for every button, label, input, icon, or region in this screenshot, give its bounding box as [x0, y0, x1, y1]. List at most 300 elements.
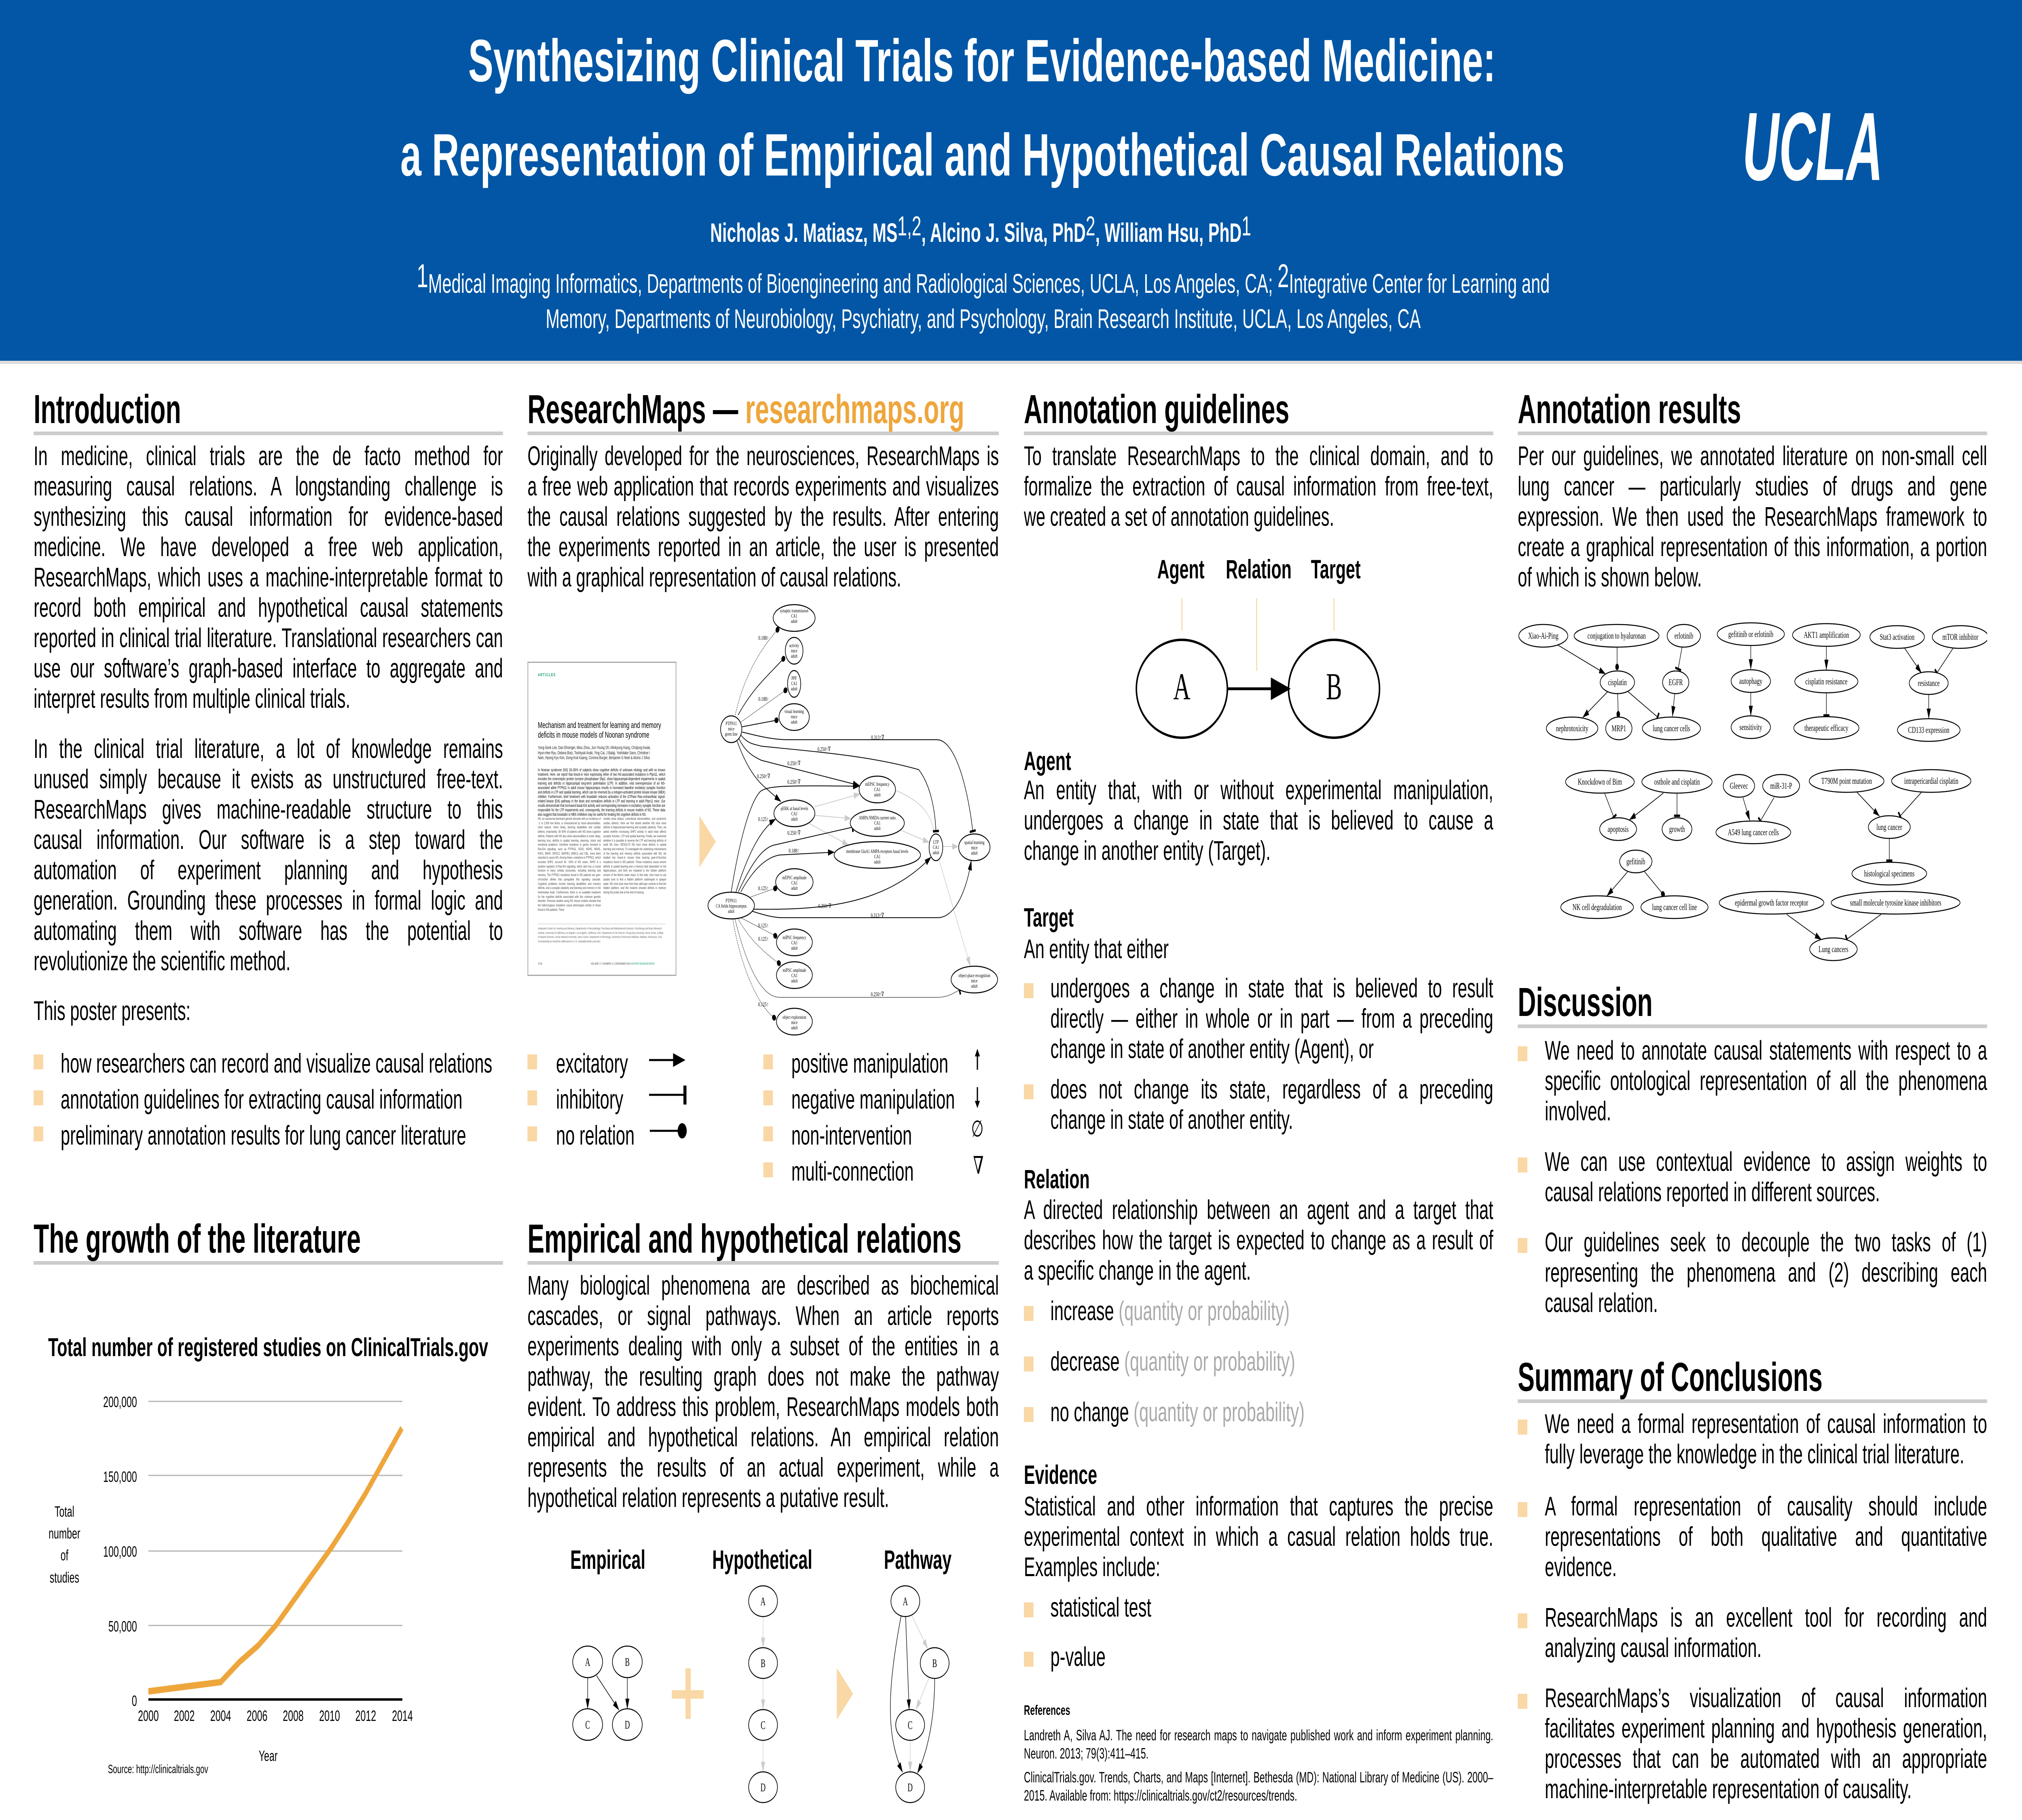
edges — [1558, 645, 1953, 940]
heading: growth of the literature: The growth of the literature — [34, 1216, 361, 1261]
text: researchmaps description: the experiments reported in an article, the user is presented — [527, 532, 999, 562]
label: hypothetical: Hypothetical — [712, 1545, 812, 1575]
y-axis labels: 50,000 — [108, 1618, 137, 1635]
bullet: contextual evidence: We can use contextual evidence to assign weights to — [1545, 1147, 1987, 1177]
bullet: visualization: facilitates experiment planning and hypothesis generation, — [1545, 1714, 1987, 1744]
text: relation definition: a specific change in the agent. — [1024, 1256, 1251, 1286]
nodes: gefitinib — [1626, 857, 1645, 866]
edge weight labels: 0.188↑ — [789, 847, 799, 854]
nodes: epidermal growth factor receptor — [1735, 898, 1808, 908]
text: researchmaps description: Originally developed for the neurosciences, ResearchMaps is — [527, 441, 999, 471]
edge weight labels: 0.250↑∇ — [871, 991, 884, 998]
heading: introduction — [34, 387, 503, 435]
text: agent definition: undergoes a change in state that is believed to cause a — [1024, 806, 1493, 836]
panel: discussion — [1518, 980, 1987, 1315]
bullet: decrease — [1024, 1347, 1493, 1377]
text: intro paragraph 2: ResearchMaps gives machine-readable structure to this — [34, 795, 503, 825]
edge weight labels: 0.188↑ — [758, 635, 769, 641]
hypothetical graph — [749, 1586, 777, 1803]
graph nodes: germ line — [725, 731, 738, 737]
nodes: resistance — [1918, 678, 1940, 688]
y-axis title: number — [49, 1525, 80, 1542]
text: researchmaps description: the causal relations suggested by the results. After entering — [527, 502, 999, 532]
graph nodes: PTPN11 — [725, 898, 737, 904]
nodes: histological specimens — [1864, 869, 1914, 878]
hypothetical graph: C — [761, 1719, 766, 1732]
diagram: agent relation target: Relation — [1226, 554, 1292, 584]
nodes: lung cancer cell line — [1652, 902, 1697, 912]
nodes: gefitinib or erlotinib — [1728, 629, 1773, 639]
list: poster contents: annotation guidelines for extracting causal information — [61, 1085, 462, 1115]
nodes: Knockdown of Bim — [1578, 777, 1622, 787]
text: evidence definition — [1024, 1492, 1493, 1583]
text: relations description: cascades, or signal pathways. When an article reports — [527, 1301, 999, 1331]
text: relations description: evident. To address this problem, ResearchMaps models both — [527, 1392, 999, 1422]
y-axis title — [49, 1503, 80, 1586]
graph nodes: adult — [791, 686, 797, 692]
graph nodes: pERK at basal levels — [780, 806, 808, 812]
edge weight labels — [757, 635, 884, 1008]
bullet: ontological representation: specific ontological representation of all the phenomena — [1545, 1066, 1987, 1096]
text: intro paragraph 2: revolutionize the scientific method. — [34, 946, 290, 976]
heading: summary of conclusions: Summary of Conclusions — [1518, 1354, 1823, 1400]
legend: manipulation types: negative manipulation — [791, 1085, 955, 1115]
edge weight labels: 0.188↑ — [758, 696, 769, 703]
reference one: Landreth A, Silva AJ. The need for research maps to navigate published work and inform experiment planning. — [1024, 1727, 1493, 1744]
subheading: relation: Relation — [1024, 1164, 1090, 1194]
text: evidence definition: Examples include: — [1024, 1552, 1160, 1582]
graph nodes: CA1 — [791, 681, 797, 687]
graph nodes: CA1 — [791, 613, 797, 619]
text: target definition: An entity that either — [1024, 934, 1169, 964]
label: empirical: Empirical — [570, 1545, 645, 1575]
graph nodes: adult — [791, 816, 797, 822]
bullet: increase: increase (quantity or probability) — [1051, 1296, 1290, 1326]
nodes: mTOR inhibitor — [1942, 632, 1978, 642]
article thumbnail: Mechanism and treatment for learning and memory — [538, 720, 661, 730]
edge weight labels: 0.250↑∇ — [818, 903, 831, 910]
heading: annotation results: Annotation results — [1518, 387, 1741, 432]
graph nodes: CA1 — [791, 880, 797, 886]
edge weight labels: 0.250↑∇ — [787, 830, 800, 836]
graph nodes: PPF — [791, 675, 797, 681]
diagram: agent relation target: Agent — [1157, 554, 1204, 584]
x-axis labels: 2000 — [138, 1707, 159, 1724]
gray hypothetical edges — [808, 790, 971, 967]
nodes: lung cancer cells — [1653, 724, 1690, 733]
reference two: 2015. Available from: https://clinicaltrials.gov/ct2/resources/trends. — [1024, 1787, 1297, 1804]
bullet: increase — [1024, 1296, 1493, 1327]
legend: manipulation types: multi-connection — [791, 1157, 914, 1187]
bullet: contextual evidence — [1518, 1147, 1987, 1208]
pathway graph: C — [908, 1719, 912, 1732]
graph nodes: adult — [874, 792, 880, 798]
bullet: excellent tool: ResearchMaps is an excellent tool for recording and — [1545, 1603, 1987, 1633]
authors: Nicholas J. Matiasz, MS1,2, Alcino J. Silva, PhD2, William Hsu, PhD1 — [710, 211, 1251, 248]
subheading: evidence: Evidence — [1024, 1460, 1097, 1490]
graph nodes: PTPN11 — [725, 721, 737, 727]
edge weight labels: 0.250↑∇ — [817, 746, 831, 753]
article thumbnail: Integrative Center for Learning and Memory, Departments of Neurobiology, Psychiatry and Biobehavioral Sciences, Psychology and Brain Research Institute, University of California Los Angeles, Los Angeles, California, USA. Department of Life Science, Chung-Ang University, Seoul, Korea. College of Natural Sciences, Seoul National University, Seoul, Korea. Department of Neurology, University of Wisconsin-Madison, Madison, Wisconsin, USA. Correspondence should be addressed to A.J.S. (silvaa@mednet.ucla.edu). — [538, 927, 664, 943]
bullet: qualitative and quantitative — [1518, 1492, 1987, 1583]
empirical graph — [573, 1646, 642, 1740]
graph nodes: mice — [791, 1020, 797, 1026]
graph nodes: adult — [791, 618, 797, 624]
bullet: decrease: decrease (quantity or probability) — [1051, 1347, 1295, 1377]
edge weight labels: 0.125↑ — [758, 816, 768, 823]
bullet: formal representation — [1518, 1409, 1987, 1470]
text: intro paragraph 1: synthesizing this causal information for evidence-based — [34, 502, 503, 532]
bullet: visualization — [1518, 1683, 1987, 1805]
bullet: p-value — [1024, 1642, 1493, 1672]
empirical graph: A — [585, 1656, 590, 1669]
text: intro paragraph 1: measuring causal relations. A longstanding challenge is — [34, 472, 503, 502]
bullet: visualization: processes that can be automated with an appropriate — [1545, 1744, 1987, 1774]
nodes: EGFR — [1669, 677, 1683, 687]
text: intro paragraph 1: use our software’s graph-based interface to aggregate and — [34, 654, 503, 684]
nodes: T790M point mutation — [1821, 776, 1872, 786]
text: annotation results description: expression. We then used the ResearchMaps framework to — [1518, 502, 1987, 532]
nodes: small molecule tyrosine kinase inhibitors — [1850, 898, 1941, 908]
text: guidelines intro — [1024, 441, 1493, 532]
edge weight labels: 0.250↑∇ — [757, 773, 770, 780]
poster title: Synthesizing Clinical Trials for Evidence-based Medicine: — [468, 28, 1495, 94]
graph nodes: adult — [791, 1025, 797, 1031]
bullet: p-value: p-value — [1051, 1642, 1106, 1672]
bullet: visualization: ResearchMaps’s visualization of causal information — [1545, 1683, 1987, 1713]
edge weight labels: 0.250↑∇ — [787, 760, 800, 767]
heading: empirical and hypothetical: Empirical and hypothetical relations — [527, 1216, 962, 1261]
affiliations — [253, 263, 1714, 340]
nodes: apoptosis — [1607, 824, 1629, 834]
text: researchmaps description: a free web application that records experiments and visualizes — [527, 472, 999, 502]
graph nodes: adult — [933, 850, 939, 856]
x-axis labels: 2002 — [174, 1707, 195, 1724]
graph nodes: CA1 — [933, 844, 939, 851]
nodes: CD133 expression — [1908, 725, 1949, 735]
heading: discussion — [1518, 980, 1987, 1028]
nodes: AKT1 amplification — [1804, 630, 1849, 640]
legend: manipulation types — [764, 1046, 994, 1190]
article thumbnail: Yong-Seok Lee, Dan Ehninger, Miou Zhou, Jun-Young Oh, Minkyung Kang, Chuljung Kwak, Hyun-Hee Ryu, Delana Butz, Toshiyuki Araki, Ying Cai, J Balaji, Yoshitake Sano, Christine I Nam, Hyong Kyu Kim, Dong-Kuk Kaang, Corinna Burger, Benjamin G Neel & Alcino J Silva — [538, 745, 651, 760]
x-axis labels — [138, 1707, 413, 1724]
pathway graph: B — [932, 1657, 937, 1670]
diagram: agent relation target: B — [1326, 665, 1342, 707]
text: poster presents: This poster presents: — [34, 996, 190, 1026]
nodes: therapeutic efficacy — [1804, 723, 1849, 733]
x-axis labels: 2006 — [247, 1707, 267, 1724]
graph nodes: adult — [728, 908, 734, 914]
subheading: agent: Agent — [1024, 746, 1071, 776]
bullet: visualization: machine-interpretable representation of causality. — [1545, 1774, 1912, 1804]
text: annotation results description: lung cancer — particularly studies of drugs and gene — [1518, 472, 1987, 502]
bullet: decouple tasks: representing the phenomena and (2) describing each — [1545, 1258, 1987, 1288]
x-axis labels: 2010 — [319, 1707, 340, 1724]
legend: relation types: no relation — [556, 1121, 635, 1151]
text: agent definition: change in another entity (Target). — [1024, 836, 1271, 866]
graph nodes: adult — [791, 978, 797, 984]
y-axis labels: 150,000 — [103, 1468, 137, 1485]
bullet: qualitative and quantitative: representations of both qualitative and quantitative — [1545, 1522, 1987, 1552]
graph nodes: mice — [791, 714, 797, 720]
legend: manipulation symbols: ∅ — [971, 1117, 984, 1142]
nodes: sensitivity — [1739, 722, 1762, 732]
bullet: statistical test: statistical test — [1051, 1593, 1151, 1623]
nodes: cisplatin — [1608, 677, 1627, 687]
graph nodes: spatial learning — [964, 840, 985, 846]
text: evidence definition: Statistical and other information that captures the precise — [1024, 1492, 1493, 1522]
text: relations description — [527, 1271, 999, 1513]
reference one: Neuron. 2013; 79(3):411–415. — [1024, 1745, 1148, 1762]
text: intro paragraph 1: medicine. We have developed a free web application, — [34, 532, 503, 562]
panel: introduction — [34, 387, 503, 1151]
graph nodes: LTP — [933, 839, 939, 845]
nodes: Stat3 activation — [1880, 632, 1914, 642]
legend: relation symbols — [647, 1043, 713, 1141]
text: intro paragraph 1: reported in clinical trial literature. Translational researchers can — [34, 623, 503, 653]
bullet: formal representation: fully leverage the knowledge in the clinical trial literature. — [1545, 1439, 1964, 1469]
article thumbnail: deficits in mouse models of Noonan syndrome — [538, 730, 649, 740]
bullet: target case one: change in state of another entity (Agent), or — [1051, 1034, 1374, 1064]
article thumbnail: models show delays, craniofacial abnormalities, and syndromic cardiac defects. Here we first tested whether NS mice have deficits in hippocampal learning and synaptic plasticity. Then, we asked whether increasing SHP2 activity in adult brain affects synaptic function, LTP and spatial learning. Finally, we examined whether it is possible to reverse the LTP and learning deficits of adult NS mice. RESULTS NS mice show deficits in spatial learning and memory. To investigate the underlying mechanisms of the learning and memory deficits associated with NS, we studied two knock-in mouse lines bearing gain-of-function mutations found in NS patients. These mutations cause severe deficits in spatial learning and a memory task dependent on the hippocampus, and both are impaired in the hidden platform version of the Morris water maze. In this task, mice have to use spatial cues to find a hidden platform submerged in opaque water. NS mice took more time than wild-type controls to find the hidden platform, and the mutants showed deficits in memory during the probe trial at the end of training. — [603, 817, 666, 894]
bullet: formal representation: We need a formal representation of causal information to — [1545, 1409, 1987, 1439]
causal graph example — [527, 595, 999, 1039]
graph nodes: CA1 — [874, 820, 880, 826]
text: researchmaps description: with a graphical representation of causal relations. — [527, 563, 901, 593]
graph nodes: CA1 — [791, 940, 797, 946]
graph nodes: object-place recognition — [958, 973, 990, 979]
graph nodes: adult — [971, 850, 977, 856]
graph nodes: mIPSC frequency — [783, 935, 806, 941]
bullet: target case two — [1024, 1075, 1493, 1135]
article thumbnail: 1734 VOLUME 17 | NUMBER 12 | DECEMBER 2014 NATURE NEUROSCIENCE — [538, 962, 655, 965]
nodes: autophagy — [1739, 676, 1763, 686]
text: intro paragraph 2: automating them with software has the potential to — [34, 916, 503, 946]
nodes: cisplatin resistance — [1805, 677, 1847, 686]
nodes: A549 lung cancer cells — [1728, 827, 1779, 837]
panel: summary of conclusions — [1518, 1354, 1987, 1812]
text: intro paragraph 2: causal information. Our software is a step toward the — [34, 825, 503, 855]
text: relation definition: A directed relationship between an agent and a target that — [1024, 1195, 1493, 1225]
bullet: decouple tasks: causal relation. — [1545, 1288, 1658, 1318]
text: annotation results description: of which is shown below. — [1518, 563, 1702, 593]
text: relation definition: describes how the target is expected to change as a result of — [1024, 1225, 1493, 1255]
panel: annotation results — [1518, 387, 1987, 965]
edge weight labels: 0.250↑∇ — [787, 779, 800, 785]
diagram: empirical plus hypothetical equals pathway — [527, 1537, 999, 1808]
bullet: target case one: directly — either in whole or in part — from a preceding — [1051, 1004, 1493, 1034]
bullet: no change — [1024, 1397, 1493, 1428]
x-axis labels: 2012 — [355, 1707, 376, 1724]
text: intro paragraph 1 — [34, 441, 503, 714]
hypothetical graph: D — [761, 1782, 766, 1794]
graph nodes: mice — [791, 648, 797, 654]
chart title: Total number of registered studies on ClinicalTrials.gov — [48, 1333, 488, 1362]
reference two: ClinicalTrials.gov. Trends, Charts, and Maps [Internet]. Bethesda (MD): National Library of Medicine (US). 2000– — [1024, 1769, 1493, 1786]
diagram: agent relation target: Target — [1311, 554, 1361, 584]
text: researchmaps description — [527, 441, 999, 593]
pathway graph — [890, 1586, 949, 1803]
graph nodes: CA fields hippocampus — [716, 903, 747, 909]
legend: relation types: inhibitory — [556, 1085, 623, 1115]
bullet: contextual evidence: causal relations reported in different sources. — [1545, 1177, 1880, 1207]
article thumbnail: In Noonan syndrome (NS) 30–50% of subjects show cognitive deficits of unknown etiology and with no known treatment. Here, we report that knock-in mice expressing either of two NS-associated mutations in Ptpn11, which encodes the nonreceptor protein tyrosine phosphatase Shp2, show hippocampal-dependent impairments in spatial learning and deficits in hippocampal long-term potentiation (LTP). In addition, viral overexpression of an NS-associated allele PTPN11 in adult mouse hippocampus results in increased baseline excitatory synaptic function and deficits in LTP and spatial learning, which can be reversed by a mitogen-activated protein kinase kinase (MEK) inhibitor. Furthermore, brief treatment with lovastatin reduces activation of the GTPase Ras–extracellular signal-related kinase (Erk) pathway in the brain and normalizes deficits in LTP and learning in adult Ptpn11 mice. Our results demonstrate that increased basal Erk activity and corresponding increases in excitatory synaptic function are responsible for the LTP impairments and, consequently, the learning deficits in mouse models of NS. These data also suggest that lovastatin or MEK inhibitors may be useful for treating the cognitive deficits in NS. — [538, 768, 665, 817]
nodes — [1519, 623, 1988, 961]
graph nodes: object exploration — [783, 1014, 806, 1020]
arrow: combination result — [837, 1668, 853, 1720]
hypothetical graph: A — [761, 1596, 766, 1608]
text: relations description: empirical and hypothetical relations. An empirical relation — [527, 1422, 999, 1452]
list: poster contents: how researchers can record and visualize causal relations — [61, 1049, 492, 1079]
graph nodes: activity — [789, 643, 799, 649]
bullet: qualitative and quantitative: A formal representation of causality should include — [1545, 1492, 1987, 1522]
graph nodes: adult — [791, 885, 797, 891]
empirical graph: C — [585, 1719, 590, 1731]
source note: Source: http://clinicaltrials.gov — [108, 1763, 208, 1776]
graph nodes: visual learning — [785, 709, 804, 715]
header banner — [0, 0, 2022, 361]
bullet: target case one — [1024, 973, 1493, 1064]
edge weight labels: 0.125↑ — [758, 935, 768, 942]
bullet: ontological representation: We need to annotate causal statements with respect to a — [1545, 1036, 1987, 1066]
text: annotation results description: create a graphical representation of this information, a portion — [1518, 532, 1987, 562]
nodes: nephrotoxicity — [1556, 724, 1588, 733]
text: annotation results description — [1518, 441, 1987, 593]
bullet: ontological representation — [1518, 1036, 1987, 1127]
text: agent definition — [1024, 775, 1493, 866]
nodes: growth — [1669, 824, 1685, 834]
label: pathway: Pathway — [884, 1545, 952, 1575]
heading: researchmaps: ResearchMaps — researchmaps.org — [527, 387, 964, 432]
empirical graph: D — [625, 1719, 630, 1731]
edge weight labels: 0.125↑ — [758, 1001, 768, 1008]
graph nodes: membrane GluA1 AMPA receptors basal levels — [846, 849, 908, 855]
line chart: registered studies — [34, 1294, 504, 1784]
text: intro paragraph 1: ResearchMaps, which uses a machine-interpretable format to — [34, 563, 503, 593]
empirical graph: B — [625, 1656, 630, 1669]
affiliations: 1Medical Imaging Informatics, Departments of Bioengineering and Radiological Sciences, UCLA, Los Angeles, CA; 2Integrative Center for Learning and — [417, 258, 1550, 299]
panel: empirical and hypothetical relations — [527, 1216, 999, 1811]
nodes: MRP1 — [1612, 724, 1626, 733]
text: guidelines intro: we created a set of annotation guidelines. — [1024, 502, 1334, 532]
nodes: erlotinib — [1674, 631, 1693, 641]
text: intro paragraph 1: interpret results from multiple clinical trials. — [34, 684, 350, 714]
plus sign — [672, 1668, 704, 1719]
graph nodes: CA1 — [874, 854, 880, 860]
text: agent definition: An entity that, with or without experimental manipulation, — [1024, 775, 1493, 805]
graph nodes: mEPSC frequency — [865, 781, 890, 787]
pathway graph: A — [903, 1596, 908, 1608]
y-axis title: Total — [55, 1503, 74, 1520]
legend: manipulation types: non-intervention — [791, 1121, 912, 1151]
poster title: a Representation of Empirical and Hypothetical Causal Relations — [400, 122, 1565, 188]
arrow: article to graph — [699, 816, 716, 868]
references heading: References — [1024, 1703, 1070, 1718]
edge weight labels: 0.313↑∇ — [871, 912, 884, 919]
y-axis labels — [103, 1393, 137, 1709]
graph nodes: adult — [874, 859, 880, 865]
pathway graph: D — [907, 1782, 913, 1794]
nodes: lung cancer — [1876, 822, 1902, 832]
bullet: target case two: does not change its state, regardless of a preceding — [1051, 1075, 1493, 1105]
poster title — [0, 0, 2022, 194]
legend: manipulation symbols: ∇ — [973, 1152, 984, 1179]
subheading: target: Target — [1024, 902, 1074, 932]
list: poster contents: preliminary annotation results for lung cancer literature — [61, 1121, 466, 1151]
graph nodes: adult — [791, 945, 797, 951]
edge weight labels: 0.125↑ — [758, 922, 768, 929]
y-axis labels: 200,000 — [103, 1393, 137, 1410]
text: relation definition — [1024, 1195, 1493, 1286]
legend: manipulation symbols — [971, 1043, 986, 1181]
x-axis title: Year — [259, 1747, 277, 1764]
graph nodes: synaptic transmission — [780, 608, 808, 614]
nodes: Xiao-Ai-Ping — [1528, 631, 1559, 641]
graph nodes — [708, 605, 998, 1035]
diagram: agent relation target — [1024, 550, 1493, 744]
y-axis title: of — [61, 1547, 68, 1564]
article thumbnail: NS, an autosomal dominant genetic disorder with an incidence of ~1 in 2,500 live births, is characterized by facial abnormalities, short stature, motor delay, learning disabilities and cardiac defects. Importantly, 30–50% of patients with NS show cognitive deficits. Patients with NS also show abnormalities in motor delay, learning loss, deficits in spatial learning, planning, motor and emotional problems. Germline mutations in genes involved in Ras-Erk signaling, such as PTPN11, SOS1, KRAS, NRAS, RAF1, BRAF, SHOC2, MAP2K1 (MEK1) and CBL, have been reported to cause NS. Among these, mutations in PTPN11, which encodes SHP2, account for ~50% of NS cases. SHP2 is a positive regulator of Ras-Erk signaling, which also has a crucial function in many cellular processes, including learning and memory. The PTPN11 mutations found in NS patients are gain-of-function alleles that upregulate this signaling cascade. Cognitive problems involve learning disabilities and memory deficits, and a synaptic plasticity and learning and memory in the mammalian brain. Furthermore, there is no available treatment for the cognitive deficits associated with this common genetic disorder. Previous studies using NS mouse models showed that the heterozygous mutations cause phenotypes similar to those found in NS patients. There — [538, 817, 601, 912]
bullet: statistical test — [1024, 1593, 1493, 1623]
graph nodes: mice — [728, 726, 734, 732]
text: relations description: pathway, the resulting graph does not make the pathway — [527, 1362, 999, 1392]
graph nodes: CA1 — [791, 973, 797, 979]
heading: discussion: Discussion — [1518, 980, 1653, 1025]
heading: introduction: Introduction — [34, 387, 181, 432]
heading: annotation results — [1518, 387, 1987, 435]
bullet: excellent tool: analyzing causal information. — [1545, 1633, 1762, 1663]
nodes: osthole and cisplatin — [1654, 777, 1700, 787]
text: relations description: experiments dealing with only a subset of the entities in a — [527, 1331, 999, 1361]
text: intro paragraph 2: In the clinical trial literature, a lot of knowledge remains — [34, 734, 503, 764]
bullet: excellent tool — [1518, 1603, 1987, 1663]
data line — [148, 1428, 402, 1691]
bullet: target case one: undergoes a change in state that is believed to result — [1051, 973, 1493, 1003]
nodes: intrapericardial cisplatin — [1904, 776, 1959, 786]
y-axis title: studies — [50, 1569, 79, 1586]
graph nodes: CA1 — [791, 811, 797, 817]
text: relations description: hypothetical relation represents a putative result. — [527, 1483, 889, 1513]
text: relations description: Many biological phenomena are described as biochemical — [527, 1271, 999, 1301]
y-axis labels: 100,000 — [103, 1543, 137, 1560]
text: intro paragraph 2: automation of experiment planning and hypothesis — [34, 855, 503, 885]
heading: growth of the literature — [34, 1216, 503, 1265]
graph nodes: mice — [971, 978, 977, 984]
text: evidence definition: experimental context in which a casual relation holds true. — [1024, 1522, 1493, 1552]
heading: annotation guidelines: Annotation guidelines — [1024, 387, 1289, 432]
bullet: qualitative and quantitative: evidence. — [1545, 1552, 1617, 1582]
panel: researchmaps — [527, 387, 999, 1191]
text: guidelines intro: formalize the extraction of causal information from free-text, — [1024, 472, 1493, 502]
x-axis labels: 2014 — [392, 1707, 413, 1724]
text: annotation results description: Per our guidelines, we annotated literature on non-small cell — [1518, 441, 1987, 471]
bullet: decouple tasks — [1518, 1227, 1987, 1318]
list: poster contents — [34, 1046, 503, 1154]
causal graphs: lung cancer literature — [1518, 607, 1987, 963]
edge weight labels: 0.125↑ — [758, 885, 768, 892]
y-axis labels: 0 — [132, 1692, 137, 1709]
heading: annotation guidelines — [1024, 387, 1493, 435]
x-axis labels: 2008 — [283, 1707, 304, 1724]
nodes: Lung cancers — [1819, 944, 1849, 954]
nodes: conjugation to hyaluronan — [1587, 631, 1646, 641]
bullet: decouple tasks: Our guidelines seek to decouple the two tasks of (1) — [1545, 1227, 1987, 1257]
graph nodes: mIPSC amplitude — [783, 967, 806, 973]
text: intro paragraph 2 — [34, 734, 503, 977]
text: relations description: represents the results of an actual experiment, while a — [527, 1453, 999, 1483]
x-axis labels: 2004 — [210, 1707, 231, 1724]
text: intro paragraph 2: unused simply because it exists as unstructured free-text. — [34, 764, 503, 794]
